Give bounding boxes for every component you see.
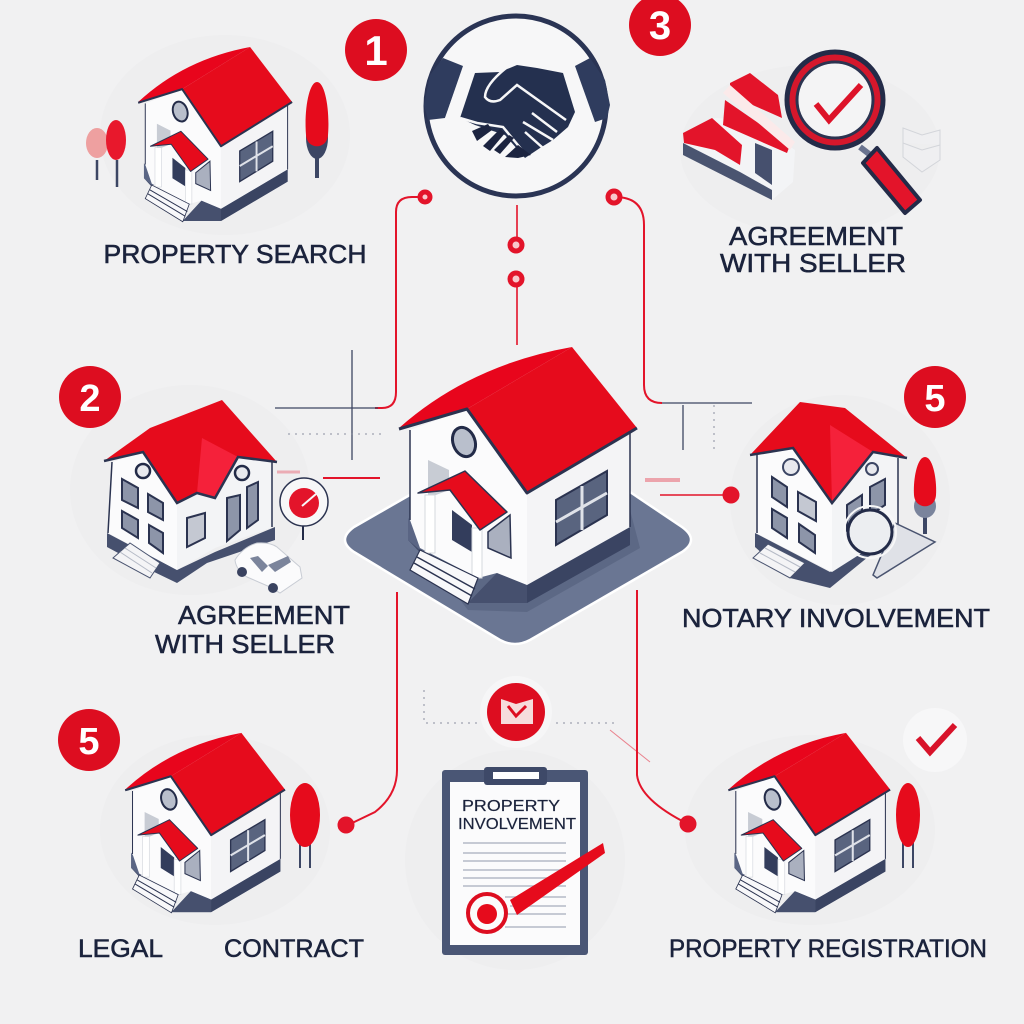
heading: agreement with seller (top right): WITH SELLER [720,248,906,278]
step 5 badge (right): 5 [924,378,946,420]
steps [113,543,160,578]
connector lines [275,197,752,825]
central platform [345,492,691,644]
step 2 badge [59,366,121,428]
tree [290,783,320,868]
clipboard title: PROPERTY [462,798,560,815]
house: legal contract [125,733,320,913]
heading: agreement with seller (top right) [720,221,906,278]
heading: agreement with seller (left): WITH SELLER [155,629,335,659]
heading: notary involvement: NOTARY INVOLVEMENT [682,603,990,633]
heading: agreement with seller (top right): AGREEMENT [729,221,903,251]
soft background halos [70,35,950,970]
house: two-storey agreement [104,400,328,593]
step 1 badge: 1 [364,27,388,74]
heading: agreement with seller (left): AGREEMENT [178,600,350,630]
heading: legal contract: LEGAL [78,935,163,963]
red pen [468,843,605,932]
icon: check mark badge [903,708,967,772]
clipboard title: INVOLVEMENT [458,816,576,833]
house: property registration [728,733,920,913]
tree [896,783,920,868]
node dots [340,191,737,831]
step 1 badge [345,19,407,81]
heading: legal contract: CONTRACT [224,935,364,963]
icon: red marker [280,478,328,540]
step 5 badge (right) [904,366,966,428]
clipboard [442,767,605,955]
house: notary [750,402,936,588]
icon: red document badge [480,676,552,748]
icon: house and magnifier [683,52,940,213]
heading: property search: PROPERTY SEARCH [104,239,366,269]
central house [399,347,637,604]
house: property search [86,47,328,222]
step 3 badge [629,0,691,56]
small trees [86,120,126,187]
icon: car [235,543,302,593]
icon: handshake [424,16,610,196]
heading: agreement with seller (left) [155,600,350,659]
clipboard title [458,798,576,833]
step 2 badge: 2 [79,378,101,420]
steps [753,544,805,578]
heading: legal contract [78,935,364,963]
step 5 badge (left) [58,709,120,771]
step 5 badge (left): 5 [78,721,100,763]
icon: notary seal [844,506,935,578]
step 3 badge: 3 [649,4,671,48]
tree [914,457,936,534]
tree [306,82,328,178]
heading: property registration: PROPERTY REGISTRATION [669,935,987,963]
